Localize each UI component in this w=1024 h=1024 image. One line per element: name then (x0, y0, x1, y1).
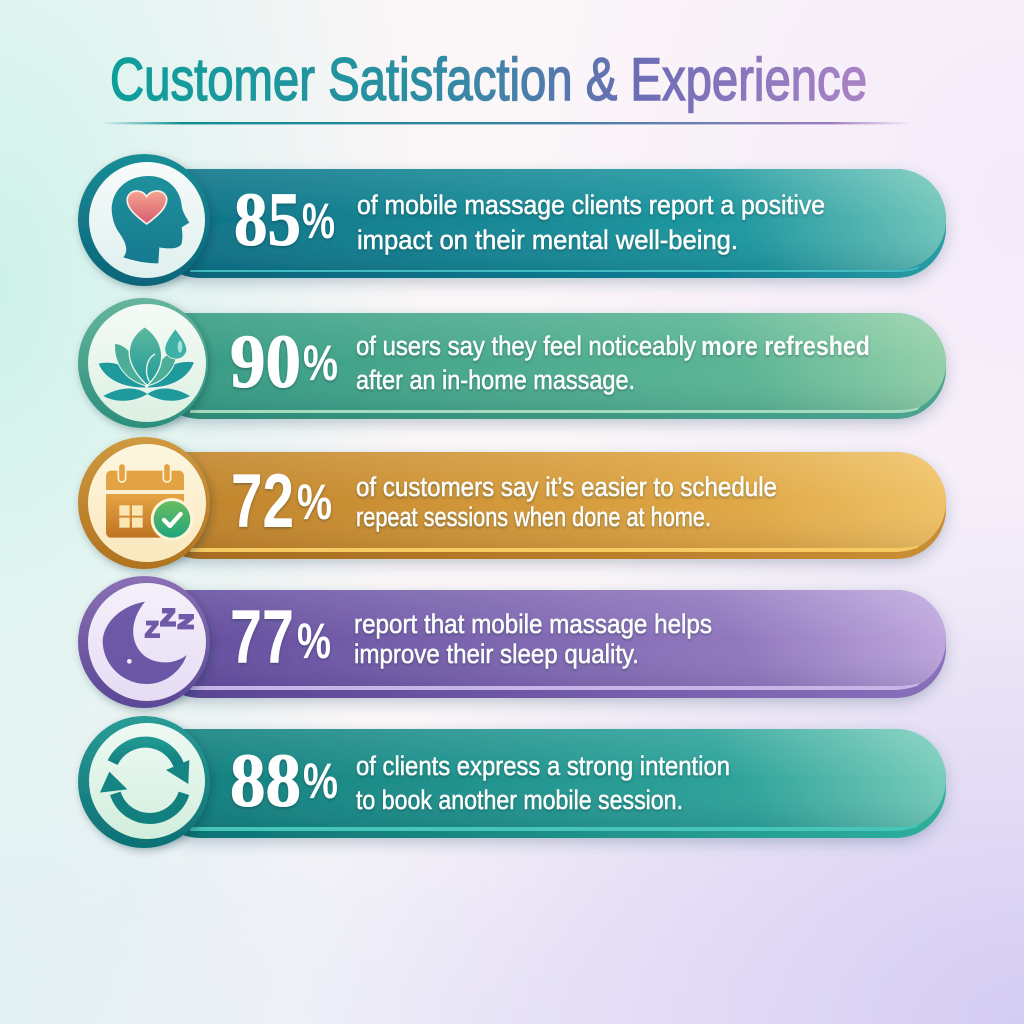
description (356, 751, 730, 815)
description (356, 331, 870, 395)
description (356, 472, 777, 532)
bar: more refreshed (150, 313, 946, 419)
stat: 88%: % (303, 753, 338, 809)
bar: easier scheduling (150, 452, 946, 559)
description: repeat sessions when done at home. (356, 502, 711, 532)
description (357, 190, 825, 255)
stat: 90%: % (303, 335, 338, 391)
description: to book another mobile session. (356, 785, 683, 815)
stat: 72%: 72 (231, 459, 294, 544)
description: improve their sleep quality. (354, 639, 639, 669)
stat: 72%: % (297, 474, 332, 530)
icon badge: moon with zzz (78, 576, 210, 708)
description: after an in-home massage. (356, 365, 635, 395)
bar: sleep quality (150, 590, 946, 698)
description: report that mobile massage helps (354, 609, 712, 639)
description (354, 609, 712, 669)
panel: 85% mental well-being (78, 154, 946, 286)
description: impact on their mental well-being. (357, 225, 738, 255)
stat: 85%: 85 (234, 178, 301, 262)
icon badge: refresh arrows (78, 716, 210, 848)
stat: 88%: 88 (230, 739, 301, 823)
bar: rebooking (150, 729, 946, 838)
description: of customers say it’s easier to schedule (356, 472, 777, 502)
panel: 88% rebooking (78, 716, 946, 848)
panel: 90% more refreshed (78, 298, 946, 428)
icon badge: calendar with check (78, 437, 210, 569)
stat: 85%: % (302, 193, 335, 249)
icon badge: head with heart (78, 154, 210, 286)
panel: 72% easier scheduling (78, 437, 946, 569)
bar: mental well-being (150, 169, 946, 278)
title rule (100, 122, 912, 124)
panel: 77% sleep quality (78, 576, 946, 708)
description: of clients express a strong intention (356, 751, 730, 781)
icon badge: lotus with droplet (78, 298, 208, 428)
description: more refreshed (701, 331, 870, 361)
description: of users say they feel noticeably (356, 331, 697, 361)
stat: 77%: % (297, 613, 331, 669)
stat: 77%: 77 (230, 595, 294, 680)
description: of mobile massage clients report a positive (357, 190, 825, 220)
stat: 90%: 90 (230, 320, 301, 404)
